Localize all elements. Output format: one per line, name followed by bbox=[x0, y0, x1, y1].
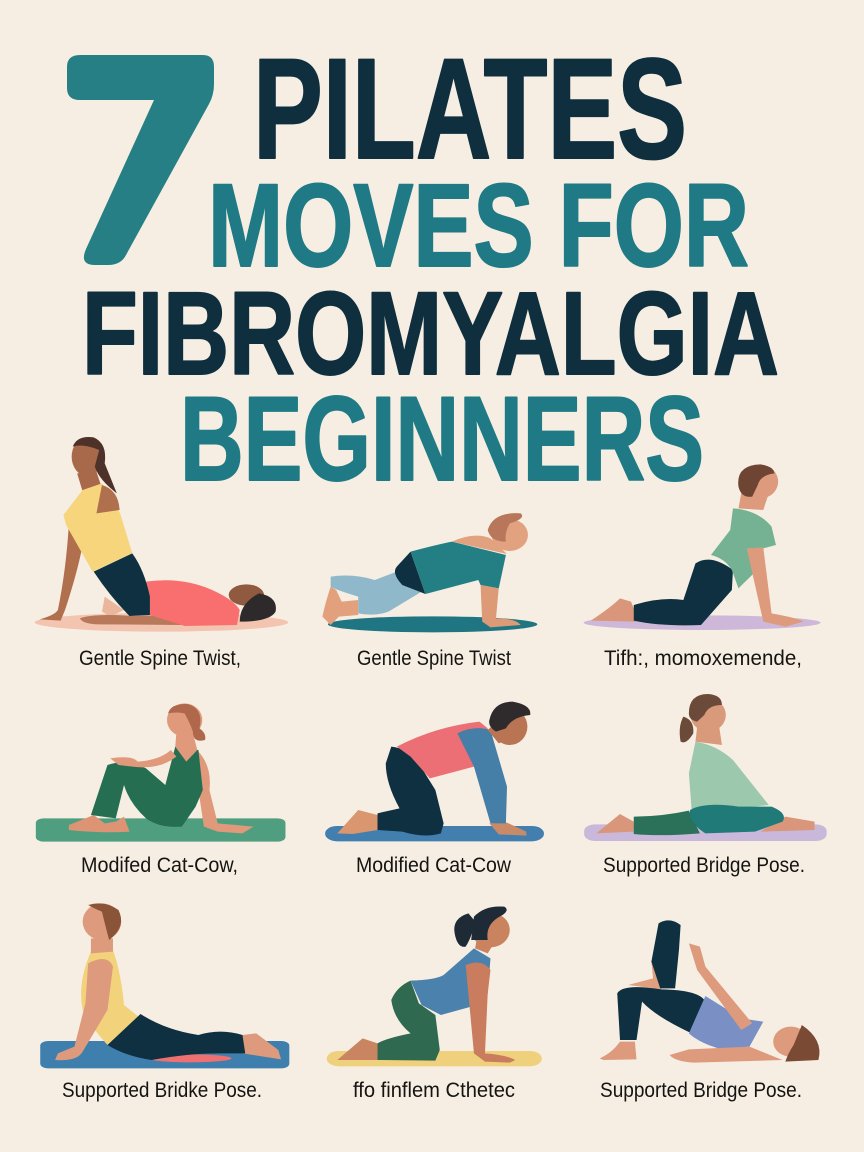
caption: ffo finflem Cthetec bbox=[353, 1079, 515, 1102]
illustration: woman with lying partner on peach mat bbox=[35, 437, 288, 632]
illustration: man on all fours on blue mat bbox=[325, 702, 544, 841]
panel: row 2 left bbox=[36, 703, 285, 877]
caption: Gentle Spine Twist bbox=[357, 647, 511, 670]
panel: row 1 center bbox=[322, 513, 537, 670]
caption: Modifed Cat-Cow, bbox=[81, 854, 238, 877]
caption: Modified Cat-Cow bbox=[356, 854, 512, 877]
illustration: cobra pose on blue mat bbox=[40, 903, 289, 1068]
illustration: woman on all fours on yellow mat bbox=[327, 906, 542, 1066]
panel: row 1 right bbox=[584, 464, 821, 670]
icon: big numeral 7 bbox=[67, 55, 214, 265]
caption: Gentle Spine Twist, bbox=[79, 647, 241, 670]
heading line: PILATES: PILATES bbox=[253, 30, 687, 189]
panel: row 1 left bbox=[35, 437, 288, 670]
panel: row 3 right bbox=[600, 920, 819, 1102]
illustration: cobra on knees on lilac mat bbox=[584, 464, 821, 630]
caption: Supported Bridge Pose. bbox=[603, 854, 805, 877]
illustration: seated twist on green mat bbox=[36, 703, 285, 842]
panel: row 3 left bbox=[40, 903, 289, 1102]
panel: row 2 right bbox=[584, 694, 827, 877]
illustration: plank on knees on teal mat bbox=[322, 513, 537, 632]
caption: Tifh:, momoxemende, bbox=[604, 647, 802, 670]
caption: Supported Bridge Pose. bbox=[600, 1079, 802, 1102]
caption: Supported Bridke Pose. bbox=[62, 1079, 262, 1102]
illustration: pigeon pose on lilac mat bbox=[584, 694, 827, 841]
illustration: single-leg bridge bbox=[600, 920, 819, 1063]
panel: row 3 center bbox=[327, 906, 542, 1102]
panel: row 2 center bbox=[325, 702, 544, 877]
title bbox=[67, 30, 779, 506]
